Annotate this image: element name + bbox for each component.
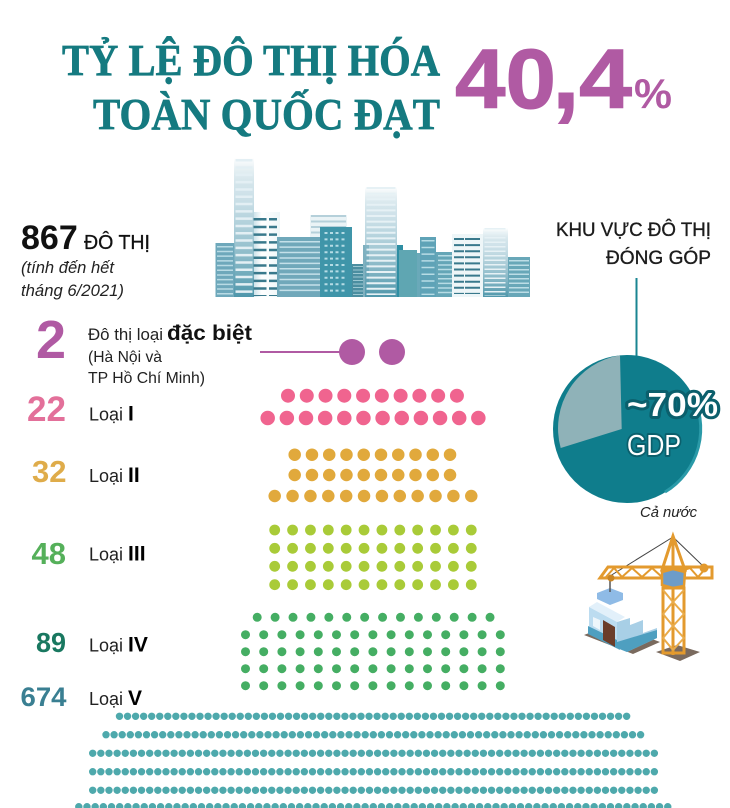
row: special class xyxy=(36,310,405,387)
headline figure 40,4%: , xyxy=(552,18,580,130)
stat: 867 urban areas: 867 xyxy=(21,219,78,257)
icon: crane and building xyxy=(584,536,712,661)
stat: 867 urban areas xyxy=(21,219,150,300)
row: class I: Loại I xyxy=(89,403,134,426)
title xyxy=(62,36,440,139)
headline figure 40,4%: % xyxy=(634,70,672,117)
headline figure 40,4%: 4 xyxy=(579,32,632,126)
row: class V: Loại V xyxy=(89,687,142,710)
title: TỶ LỆ ĐÔ THỊ HÓA xyxy=(62,36,440,85)
row: special class: Đô thị loại xyxy=(88,326,163,344)
connector line xyxy=(636,278,638,356)
headline figure 40,4%: 40 xyxy=(455,32,556,126)
row: special class: (Hà Nội và xyxy=(88,349,162,366)
headline figure 40,4% xyxy=(455,18,672,130)
row: class III: 48 xyxy=(32,536,66,571)
heading: urban contribution: ĐÓNG GÓP xyxy=(606,246,711,269)
pie chart: 70% GDP: GDP xyxy=(627,430,681,462)
row: class I xyxy=(27,390,478,429)
row: special class: TP Hồ Chí Minh) xyxy=(88,370,205,387)
row: special class: 2 xyxy=(36,310,66,370)
stat: 867 urban areas: ĐÔ THỊ xyxy=(84,231,150,254)
stat: 867 urban areas: (tính đến hết xyxy=(21,259,115,277)
row: class V xyxy=(20,682,668,807)
heading: urban contribution xyxy=(556,218,711,269)
row: class IV: 89 xyxy=(36,627,66,658)
stat: 867 urban areas: tháng 6/2021) xyxy=(21,282,124,300)
row: class II: 32 xyxy=(32,454,66,489)
illustration: city skyline xyxy=(216,158,530,297)
row: class III: Loại III xyxy=(89,543,146,566)
row: class IV xyxy=(36,617,501,686)
pie chart: 70% GDP xyxy=(553,355,718,503)
pie chart: 70% GDP: ~70% xyxy=(627,386,718,423)
heading: urban contribution: KHU VỰC ĐÔ THỊ xyxy=(556,218,711,241)
row: class II xyxy=(32,454,472,496)
caption: whole country: Cả nước xyxy=(640,504,697,521)
row: class V: 674 xyxy=(20,682,66,712)
row: class IV: Loại IV xyxy=(89,634,148,657)
row: special class: đặc biệt xyxy=(167,322,252,345)
title: TOÀN QUỐC ĐẠT xyxy=(93,89,440,139)
row: class II: Loại II xyxy=(89,464,140,487)
row: class I: 22 xyxy=(27,390,66,429)
row: class III xyxy=(32,530,472,585)
